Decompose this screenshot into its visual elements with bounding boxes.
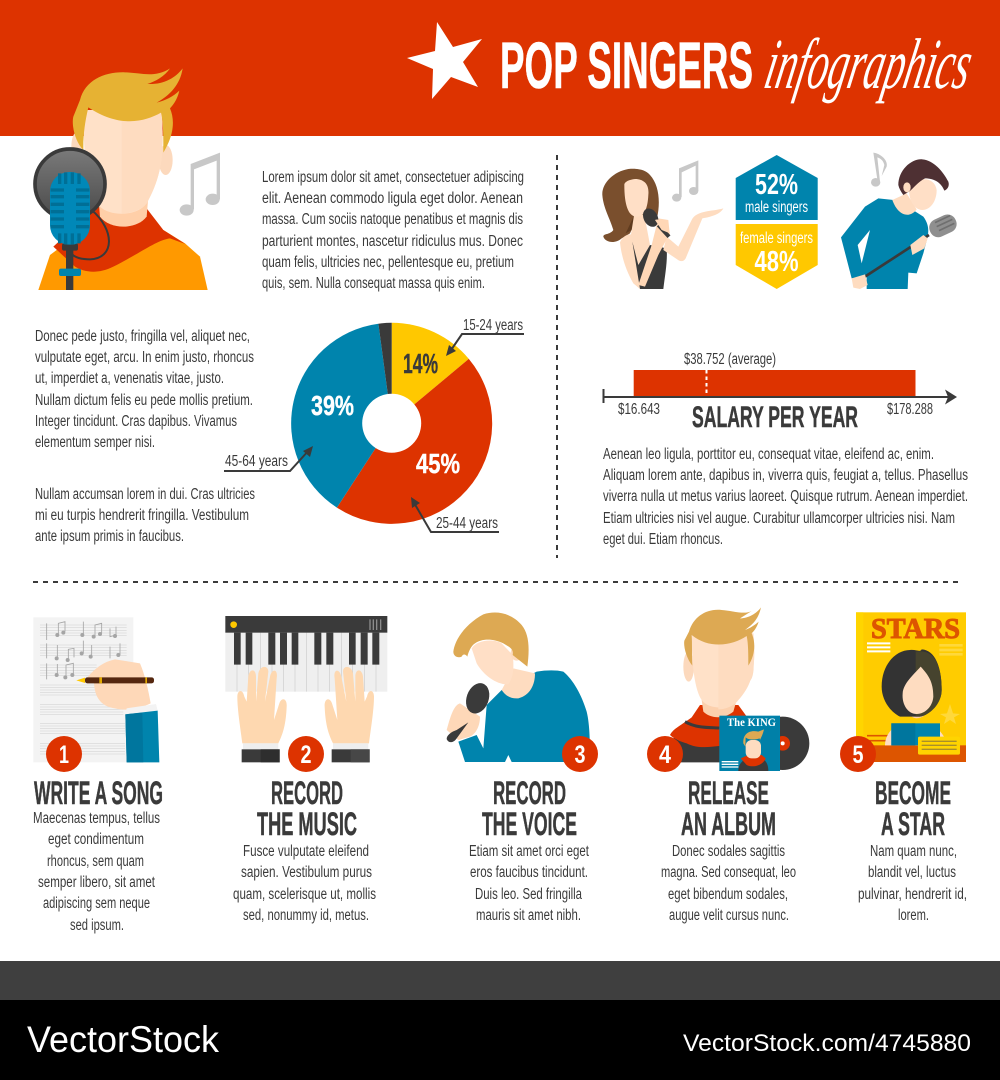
watermark bar — [0, 1000, 1000, 1080]
step text: semper libero, sit amet — [38, 874, 156, 891]
intro paragraph: quis, sem. Nulla consequat massa quis enim. — [262, 275, 485, 292]
step text: adipiscing sem neque — [43, 895, 150, 912]
step text — [233, 843, 376, 924]
left paragraph 2: mi eu turpis hendrerit fringilla. Vestibulum — [35, 507, 249, 524]
chart: salary per year: $178.288 — [887, 401, 933, 418]
left paragraph 1: Nullam dictum felis eu pede mollis pretium. — [35, 392, 253, 409]
step number 5: 5 — [852, 741, 864, 769]
step text: augue velit cursus nunc. — [669, 907, 789, 924]
step text: Maecenas tempus, tellus — [33, 810, 160, 827]
step text: eget condimentum — [48, 831, 144, 848]
callout: 15-24 years — [446, 317, 524, 356]
step heading — [257, 775, 357, 842]
illustration: magazine cover — [856, 612, 966, 762]
hexagon statistic: male and female singers: 48% — [754, 246, 799, 278]
chart: salary per year: $16.643 — [618, 401, 660, 418]
intro paragraph: massa. Cum sociis natoque penatibus et magnis dis — [262, 211, 523, 228]
step heading: RELEASE — [688, 775, 769, 811]
watermark logo: VectorStock — [27, 1019, 219, 1060]
album title: The KING — [727, 717, 776, 729]
step heading — [482, 775, 577, 842]
illustration: singer with studio microphone — [35, 68, 220, 290]
step text: sed ipsum. — [70, 917, 124, 934]
hexagon statistic: male and female singers — [736, 155, 818, 289]
step text — [33, 810, 160, 934]
callout: 45-64 years: 45-64 years — [225, 453, 288, 470]
step number 4 — [647, 736, 683, 772]
step heading — [681, 775, 776, 842]
left paragraph 1: Donec pede justo, fringilla vel, aliquet nec, — [35, 328, 250, 345]
callout: 25-44 years — [411, 497, 499, 532]
hexagon statistic: male and female singers: female singers — [740, 230, 813, 247]
step number 3 — [562, 736, 598, 772]
left paragraph 2 — [35, 486, 255, 545]
right paragraph: eget dui. Etiam rhoncus. — [603, 531, 723, 548]
step text — [661, 843, 796, 924]
illustration: piano keyboard and hands — [225, 616, 387, 762]
step text: Fusce vulputate eleifend — [243, 843, 369, 860]
intro paragraph — [262, 169, 524, 292]
intro paragraph: quam felis, ultricies nec, pellentesque eu, pretium — [262, 254, 514, 271]
step heading: RECORD — [271, 775, 343, 811]
step text: Nam quam nunc, — [870, 843, 957, 860]
chart: salary per year — [603, 351, 957, 434]
magazine title: STARS — [871, 614, 960, 645]
chart: salary per year: $38.752 (average) — [684, 351, 776, 368]
step heading: RECORD — [493, 775, 566, 811]
step text: lorem. — [898, 907, 929, 924]
step text: rhoncus, sem quam — [47, 853, 144, 870]
step text: eget bibendum sodales, — [668, 886, 788, 903]
step text: Donec sodales sagittis — [672, 843, 785, 860]
step 1: write a song — [33, 617, 163, 934]
step number 5 — [840, 736, 876, 772]
step heading: WRITE A SONG — [34, 775, 163, 811]
step number 1 — [46, 736, 82, 772]
step text: sapien. Vestibulum purus — [241, 864, 372, 881]
step heading: THE MUSIC — [257, 806, 357, 842]
left paragraph 1: ut, imperdiet a, venenatis vitae, justo. — [35, 370, 224, 387]
right paragraph — [603, 446, 968, 548]
callout: 15-24 years: 15-24 years — [463, 317, 523, 334]
left paragraph 2: ante ipsum primis in faucibus. — [35, 528, 184, 545]
value 39%: 39% — [311, 390, 354, 421]
left paragraph 2: Nullam accumsan lorem in dui. Cras ultricies — [35, 486, 255, 503]
step number 2: 2 — [300, 741, 312, 769]
step text: mauris sit amet nibh. — [476, 907, 581, 924]
step text: magna. Sed consequat, leo — [661, 864, 796, 881]
step text: Duis leo. Sed fringilla — [475, 886, 582, 903]
step text: pulvinar, hendrerit id, — [858, 886, 967, 903]
step heading: A STAR — [881, 806, 945, 842]
step text: Etiam sit amet orci eget — [469, 843, 590, 860]
intro paragraph: Lorem ipsum dolor sit amet, consectetuer adipiscing — [262, 169, 524, 186]
header banner — [0, 0, 1000, 136]
step text: blandit vel, luctus — [868, 864, 956, 881]
illustration: male singer — [841, 153, 959, 289]
step text: eros faucibus tincidunt. — [470, 864, 588, 881]
step 5: become a star — [840, 612, 967, 924]
chart: salary per year: SALARY PER YEAR — [692, 401, 858, 434]
step 3: record the voice — [447, 613, 598, 924]
step text: sed, nonummy id, metus. — [243, 907, 369, 924]
step 4: release an album — [647, 607, 809, 924]
value 14%: 14% — [403, 348, 438, 379]
step number 1: 1 — [59, 741, 69, 769]
illustration: female singer — [602, 160, 723, 289]
step number 3: 3 — [574, 741, 586, 769]
left paragraph 1: elementum semper nisi. — [35, 434, 155, 451]
step heading: AN ALBUM — [681, 806, 776, 842]
step text — [469, 843, 590, 924]
left paragraph 1: Integer tincidunt. Cras dapibus. Vivamus — [35, 413, 237, 430]
hexagon statistic: male and female singers: male singers — [745, 199, 808, 216]
step text — [858, 843, 967, 924]
step heading — [875, 775, 951, 842]
watermark url: VectorStock.com/4745880 — [683, 1030, 971, 1057]
icon: star — [407, 22, 482, 99]
title: POP SINGERS — [500, 28, 753, 102]
intro paragraph: parturient montes, nascetur ridiculus mus. Donec — [262, 233, 523, 250]
value 45%: 45% — [416, 448, 460, 479]
left paragraph 1 — [35, 328, 254, 451]
step number 4: 4 — [659, 741, 671, 769]
donut chart: age groups — [291, 323, 492, 524]
callout: 25-44 years: 25-44 years — [436, 515, 498, 532]
callout: 45-64 years — [224, 446, 313, 471]
illustration: singer with handheld microphone — [447, 613, 590, 762]
step 2: record the music — [225, 616, 387, 924]
illustration: sheet music and hand — [33, 617, 159, 762]
step heading: THE VOICE — [482, 806, 577, 842]
illustration: singer, album cover and vinyl record — [668, 607, 809, 771]
hexagon statistic: male and female singers: 52% — [755, 169, 798, 201]
step number 2 — [288, 736, 324, 772]
intro paragraph: elit. Aenean commodo ligula eget dolor. Aenean — [262, 190, 523, 207]
left paragraph 1: vulputate eget, arcu. In enim justo, rhoncus — [35, 349, 254, 366]
step text: quam, scelerisque ut, mollis — [233, 886, 376, 903]
footer band — [0, 961, 1000, 1000]
